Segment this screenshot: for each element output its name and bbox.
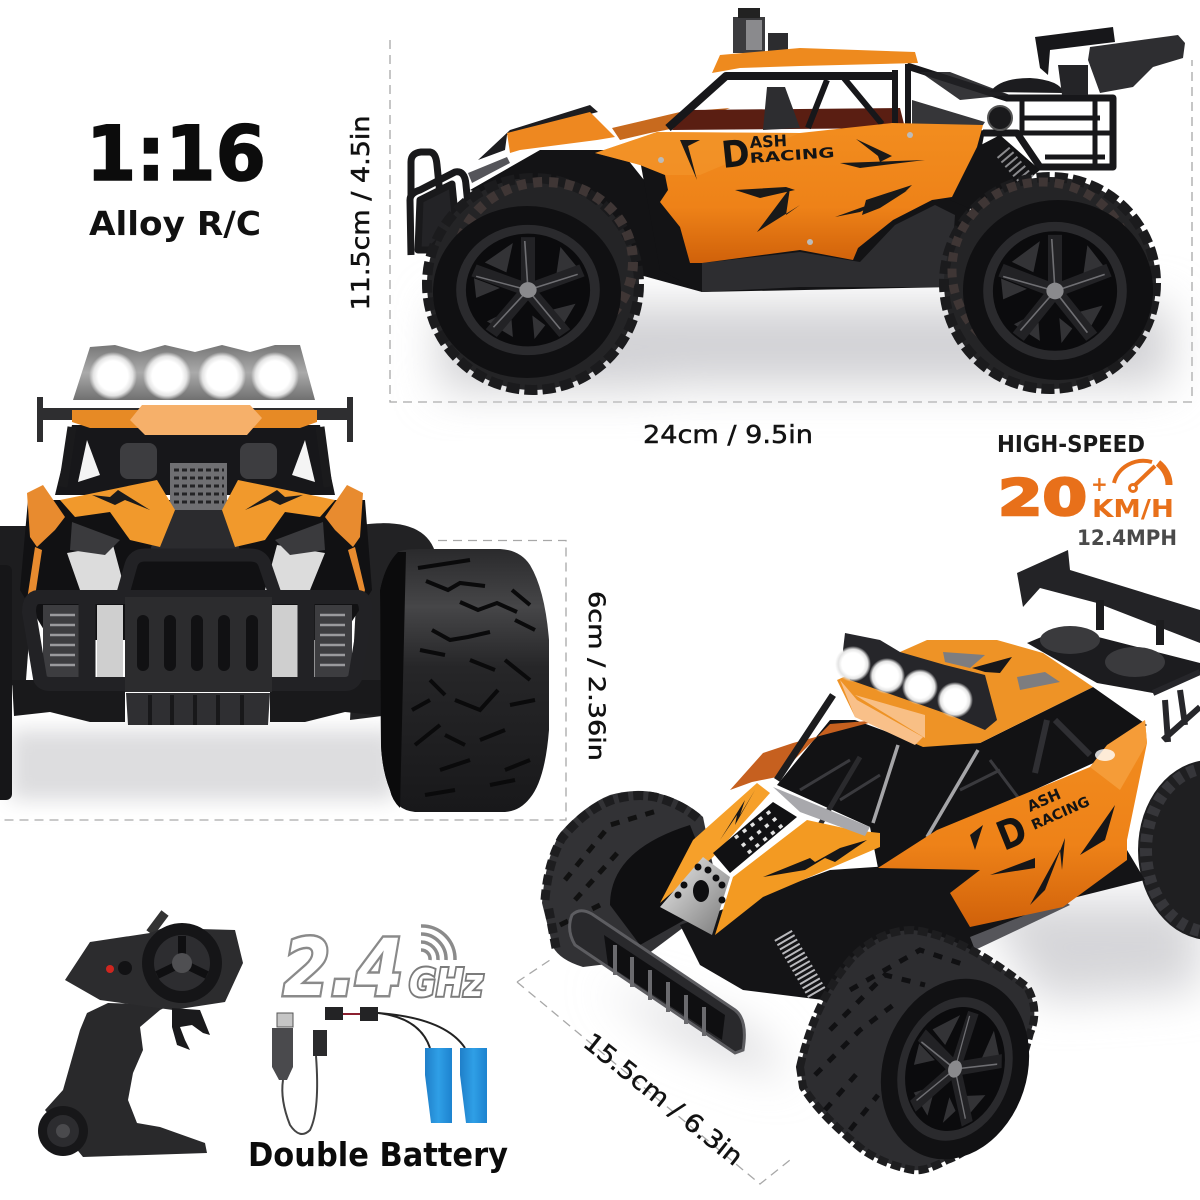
front wheel xyxy=(800,930,1052,1179)
hood bolts xyxy=(92,490,303,510)
decal: Dash Racing xyxy=(991,785,1092,860)
cage xyxy=(668,64,1113,167)
motor top xyxy=(990,78,1064,93)
hood left strip xyxy=(660,783,770,903)
red sill xyxy=(730,720,880,790)
bumper xyxy=(570,911,744,1053)
hood right strip xyxy=(715,820,880,935)
spring xyxy=(783,935,818,995)
RACING letters: RACING xyxy=(1029,794,1092,834)
hood bolt right xyxy=(763,840,867,877)
rear rack xyxy=(1153,672,1200,742)
heading: 1:16 scale: 1:16 xyxy=(86,109,266,198)
mph: 12.4MPH xyxy=(1077,526,1177,550)
ASH letters: ASH xyxy=(1024,785,1064,816)
hood xyxy=(507,112,615,153)
dimension label: width: 6cm / 2.36in xyxy=(583,591,608,761)
interior cab xyxy=(55,425,335,495)
grip xyxy=(45,1003,207,1157)
D letter: D xyxy=(719,131,752,177)
decal: Dash Racing xyxy=(719,131,835,177)
connector xyxy=(313,1030,327,1056)
roof xyxy=(72,405,317,435)
speed unit: KM/H xyxy=(1092,494,1174,523)
white window gaps xyxy=(78,440,315,482)
dimension lines: side view xyxy=(390,40,1192,402)
dimension label: depth: 15.5cm / 6.3in xyxy=(578,1027,749,1171)
dimension line: diagonal xyxy=(517,960,790,1184)
batteries xyxy=(325,1007,487,1123)
icon: speedometer xyxy=(1114,461,1169,492)
interior xyxy=(672,108,905,130)
speed value: 20 xyxy=(998,469,1087,527)
rear pillar panel xyxy=(912,72,1010,125)
car: three-quarter view xyxy=(542,550,1200,1179)
floor shadow xyxy=(600,900,1200,1080)
subheading: Alloy R/C: Alloy R/C xyxy=(89,204,261,243)
rear light xyxy=(988,106,1012,130)
plugs xyxy=(325,1007,378,1021)
D letter: D xyxy=(991,807,1034,860)
rear suspension xyxy=(950,135,1040,215)
panel highlight xyxy=(1095,749,1115,761)
wheel xyxy=(142,923,222,1003)
bumper openings xyxy=(43,605,352,680)
cable xyxy=(282,1056,317,1134)
base wheel xyxy=(38,1106,88,1156)
front wing xyxy=(468,157,510,183)
icon: signal waves xyxy=(421,926,455,960)
silver grille xyxy=(660,857,730,935)
dimension label: height: 11.5cm / 4.5in xyxy=(346,116,375,310)
grille holes xyxy=(674,864,726,904)
usb plug xyxy=(277,1013,293,1027)
bumper xyxy=(29,555,366,725)
cab side pillars xyxy=(63,427,328,487)
roof lights xyxy=(733,17,765,53)
far wheel left xyxy=(542,791,720,967)
ground shadow xyxy=(440,305,1170,390)
engine bay xyxy=(20,500,372,640)
side graphics xyxy=(680,139,925,232)
dimension label: length: 24cm / 9.5in xyxy=(643,420,813,449)
ground shadow xyxy=(10,730,395,800)
GHz: GHz xyxy=(409,961,484,1005)
RACING letters: RACING xyxy=(749,145,835,167)
speed badge xyxy=(997,432,1177,550)
plus sign: + xyxy=(1091,472,1108,496)
orange side panel xyxy=(595,123,983,263)
rear orange panel xyxy=(878,720,1147,927)
front wheel xyxy=(427,178,639,390)
engine grid xyxy=(150,463,240,552)
car: side view xyxy=(410,8,1185,390)
roof xyxy=(712,48,918,73)
interior lights xyxy=(800,760,1020,800)
pillars xyxy=(777,695,1090,845)
wires xyxy=(343,1013,465,1048)
2.4: 2.4 xyxy=(283,924,403,1014)
USB charger cable xyxy=(272,1013,327,1134)
body rivets xyxy=(658,132,913,245)
label: Double Battery: Double Battery xyxy=(248,1135,508,1174)
rear spring xyxy=(1003,152,1030,184)
rear deck xyxy=(1027,628,1200,693)
lamps xyxy=(835,633,997,730)
rear wheel xyxy=(944,177,1156,389)
front suspension xyxy=(470,150,702,292)
rear right wheel xyxy=(1138,760,1200,940)
dimension lines: front view xyxy=(0,540,566,820)
silver windshield sill xyxy=(773,787,870,836)
lamps xyxy=(89,352,299,400)
roof light bar xyxy=(73,345,315,400)
trigger xyxy=(172,1008,210,1050)
ASH letters: ASH xyxy=(749,131,787,152)
controller xyxy=(38,913,243,1157)
wing posts xyxy=(1100,600,1160,645)
badge: 2.4 GHz xyxy=(283,924,484,1014)
fender right xyxy=(325,485,365,600)
hood right xyxy=(222,480,335,547)
rear wing xyxy=(37,397,353,442)
chassis bar xyxy=(970,900,1070,950)
hood bolt left xyxy=(720,790,755,840)
mesh dots xyxy=(735,810,785,853)
under arms xyxy=(12,680,385,722)
antenna xyxy=(150,913,165,933)
front bumper xyxy=(410,152,468,255)
fans xyxy=(1040,626,1165,677)
side dark vents xyxy=(70,522,325,555)
chassis xyxy=(680,850,1145,1000)
roof xyxy=(837,640,1093,747)
left rear tyre xyxy=(0,526,32,690)
buttons xyxy=(106,961,132,975)
usb body xyxy=(272,1028,293,1080)
fender left xyxy=(27,485,65,610)
near left tyre xyxy=(0,565,12,800)
bay silver parts xyxy=(67,545,325,590)
speed heading: HIGH-SPEED xyxy=(997,432,1145,458)
hood mesh xyxy=(713,802,797,873)
panel graphics xyxy=(970,775,1115,905)
interior xyxy=(777,687,1147,868)
head xyxy=(65,928,243,1010)
big tyre xyxy=(380,549,549,812)
cells xyxy=(425,1048,452,1123)
car: front view xyxy=(0,345,549,812)
drivers xyxy=(120,443,277,479)
body underside xyxy=(640,130,985,292)
hood left xyxy=(60,480,175,547)
rear wing xyxy=(1017,550,1200,643)
right rear tyre xyxy=(350,523,437,720)
chassis tray xyxy=(702,205,955,292)
spoiler xyxy=(1035,27,1185,95)
